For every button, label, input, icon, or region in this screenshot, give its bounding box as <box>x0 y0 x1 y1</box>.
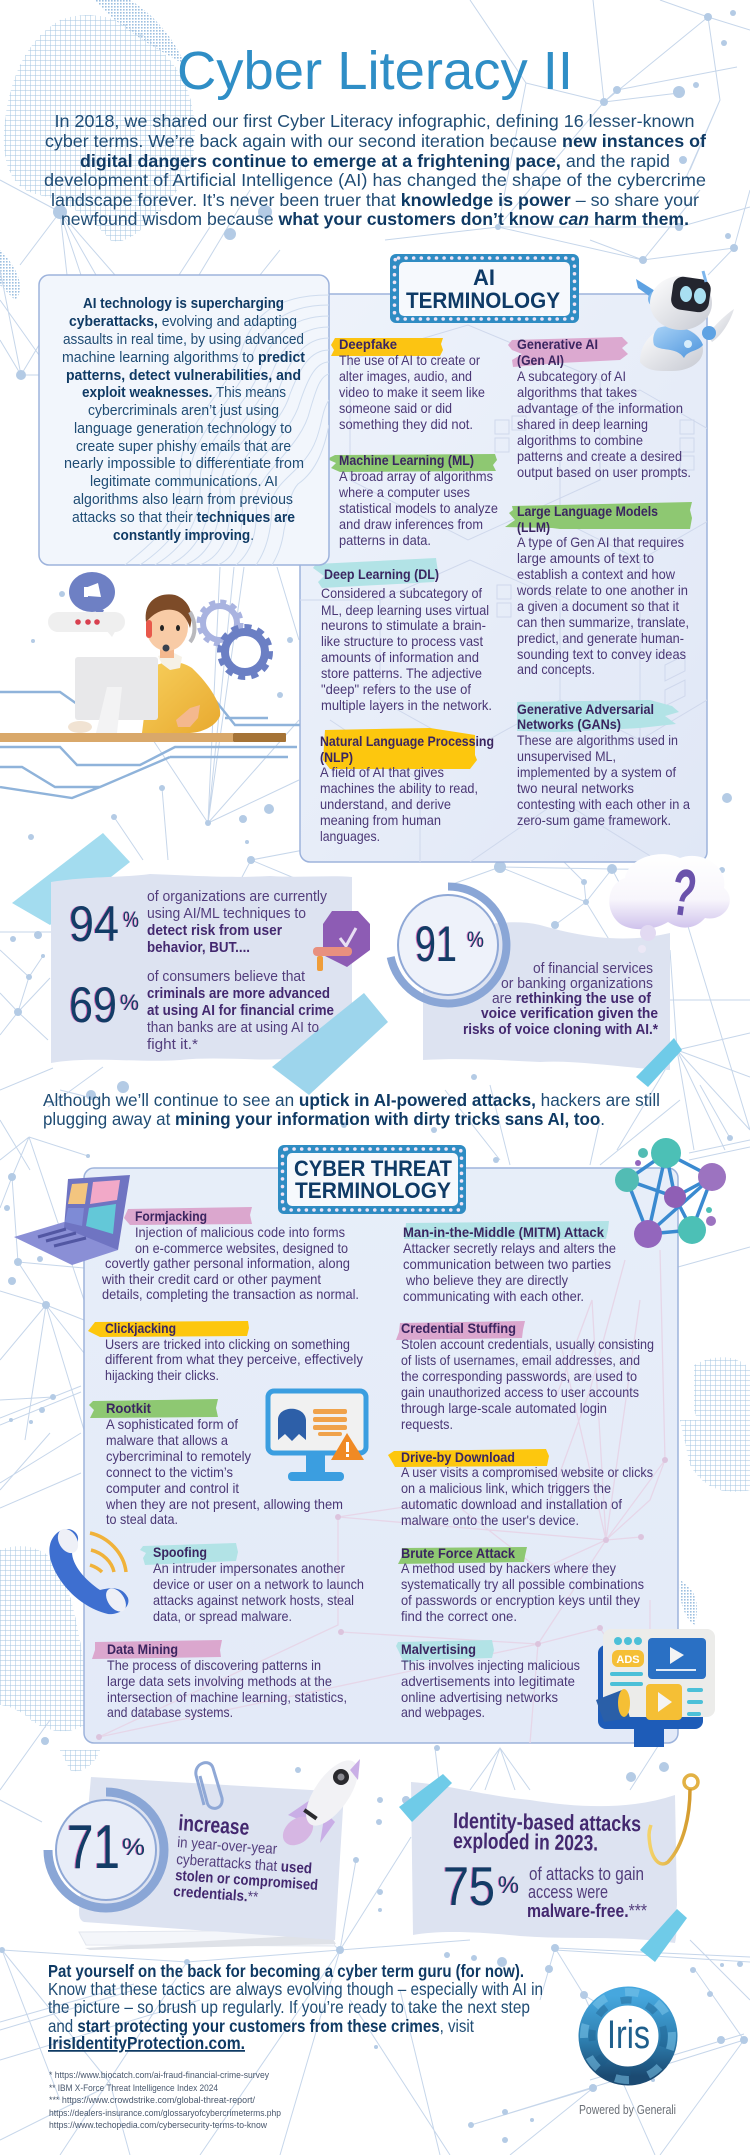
term: Malvertising: Malvertising <box>401 1641 476 1657</box>
tape: top left <box>12 833 130 925</box>
closing paragraph <box>48 1961 543 2053</box>
footnotes <box>49 2070 281 2131</box>
term: Machine Learning: Machine Learning (ML) <box>339 452 474 468</box>
term: Machine Learning: and draw inferences from <box>339 516 483 532</box>
logo: Iris <box>579 1992 676 2117</box>
panel: AI intro box: legitimate communications. AI <box>90 473 278 490</box>
panel: AI intro box: cyberattacks, evolving and adapting <box>69 313 297 330</box>
term: Generative Adversarial Networks: zero-sum game framework. <box>517 812 671 828</box>
term: Large Language Models: (LLM) <box>517 519 550 535</box>
chart: 91% ring <box>391 886 506 1004</box>
term: Natural Language Processing: machines the ability to read, <box>320 780 478 796</box>
text: 69% description: criminals are more advanced <box>147 985 330 1002</box>
chart: 71% ring: 71 <box>67 1813 120 1882</box>
term: Generative AI: algorithms that takes <box>517 384 637 400</box>
term: Deep Learning: amounts of information and <box>321 649 479 665</box>
term: Generative Adversarial Networks: These are algorithms used in <box>517 732 678 748</box>
intro paragraph <box>44 111 706 229</box>
text: 71% description <box>173 1810 319 1906</box>
term: Spoofing: An intruder impersonates another <box>153 1560 345 1576</box>
term: Clickjacking: Users are tricked into clicking on something <box>105 1336 350 1352</box>
stat: 94%: % <box>123 907 139 932</box>
panel: AI intro box: algorithms also learn from previous <box>73 491 293 508</box>
text: 94% description: detect risk from user <box>147 922 282 939</box>
term: Generative AI: output based on user prompts. <box>517 464 691 480</box>
transition text: Although we’ll continue to see an uptick in AI-powered attacks, hackers are still <box>43 1090 660 1110</box>
footnotes: *** https://www.crowdstrike.com/global-threat-report/ <box>49 2095 255 2106</box>
term: Data Mining: and database systems. <box>107 1704 233 1720</box>
text: 94% description: behavior, BUT.... <box>147 939 250 956</box>
term: Man-in-the-Middle: communicating with each other. <box>403 1288 584 1304</box>
term: Drive-by Download: on a malicious link, which triggers the <box>401 1480 611 1496</box>
term: Generative AI: algorithms to combine <box>517 432 643 448</box>
intro paragraph: cyber terms. We’re back again with our second iteration because new instances of <box>45 131 706 151</box>
term: Deep Learning: neurons to stimulate a brain- <box>321 617 486 633</box>
term: Natural Language Processing: (NLP) <box>320 749 353 765</box>
text: 75% description <box>527 1864 647 1921</box>
text: 91% description: or banking organizations <box>501 975 653 992</box>
term: Natural Language Processing: meaning from human <box>320 812 441 828</box>
text: 69% description <box>147 968 334 1053</box>
term: Man-in-the-Middle <box>403 1221 616 1304</box>
stat: 69%: 69 <box>69 977 117 1033</box>
panel: AI intro box: nearly impossible to differentiate from <box>64 455 304 472</box>
chart: 91% ring: % <box>467 927 484 952</box>
stat: 94%: 94 <box>69 896 119 952</box>
transition text: plugging away at mining your information with dirty tricks sans AI, too. <box>43 1109 605 1129</box>
sign: AI terminology: TERMINOLOGY <box>406 288 560 313</box>
tape: top left <box>399 1774 452 1822</box>
transition text <box>43 1090 660 1129</box>
term: Rootkit: cybercriminal to remotely <box>106 1448 251 1464</box>
term: Generative AI: A subcategory of AI <box>517 368 626 384</box>
panel: AI intro box <box>39 275 329 565</box>
term: Clickjacking <box>88 1320 363 1383</box>
icon: shield with lock <box>313 911 370 971</box>
tape: card right <box>272 993 388 1095</box>
text: 75% description: access were <box>528 1882 608 1902</box>
chart: 91% ring: 91 <box>415 916 457 972</box>
text: 69% description: than banks are at using AI to <box>147 1019 319 1036</box>
heading: identity-based attacks: Identity-based attacks <box>453 1808 641 1836</box>
term: Large Language Models: Large Language Models <box>517 503 658 519</box>
panel: cyber threat terminology <box>84 1168 678 1743</box>
heading: identity-based attacks: exploded in 2023. <box>453 1828 598 1856</box>
chart: 71% ring <box>48 1792 164 1908</box>
term: Large Language Models <box>505 502 692 677</box>
term: Rootkit: malware that allows a <box>106 1432 228 1448</box>
term: Rootkit: connect to the victim’s <box>106 1464 233 1480</box>
term: Credential Stuffing: Credential Stuffing <box>401 1320 516 1336</box>
term: Deepfake: alter images, audio, and <box>339 368 472 384</box>
stat: 75%: 75 <box>443 1855 495 1917</box>
term: Generative AI: patterns and create a desired <box>517 448 682 464</box>
stat card: identity-based attacks <box>399 1774 698 1962</box>
term: Generative AI: advantage of the information <box>517 400 683 416</box>
text: 91% description: voice verification given the <box>481 1005 658 1022</box>
panel: AI intro box: cybercriminals aren’t just using <box>88 402 279 419</box>
term: Credential Stuffing: of lists of usernames, email addresses, and <box>401 1352 640 1368</box>
panel: AI intro box: machine learning algorithms to predict <box>62 349 305 366</box>
term: Credential Stuffing: gain unauthorized access to user accounts <box>401 1384 639 1400</box>
term: Machine Learning: where a computer uses <box>338 484 470 500</box>
term: Generative AI <box>508 336 691 480</box>
sign: cyber threat terminology: TERMINOLOGY <box>295 1178 451 1203</box>
text: 94% description: of organizations are currently <box>147 888 327 905</box>
sign: cyber threat terminology: CYBER THREAT <box>294 1156 453 1181</box>
text: 94% description: using AI/ML techniques to <box>147 905 306 922</box>
icon: paperclip <box>196 1763 222 1808</box>
term: Generative AI: (Gen AI) <box>517 352 564 368</box>
text: 69% description: at using AI for financial crime <box>147 1002 334 1019</box>
sign: AI terminology <box>390 254 579 323</box>
term: Deep Learning: Considered a subcategory of <box>321 585 482 601</box>
term: Data Mining: Data Mining <box>107 1641 178 1657</box>
closing paragraph: and start protecting your customers from these crimes, visit <box>48 2016 474 2036</box>
term: Large Language Models: and concepts. <box>517 661 595 677</box>
term: Formjacking: covertly gather personal information, along <box>105 1255 350 1271</box>
term: Malvertising: and webpages. <box>401 1704 485 1720</box>
term: Machine Learning: A broad array of algorithms <box>339 468 493 484</box>
term: Data Mining: The process of discovering patterns in <box>107 1657 321 1673</box>
text: 75% description: of attacks to gain <box>529 1864 644 1884</box>
term: Deep Learning: Deep Learning (DL) <box>324 566 439 582</box>
intro paragraph: newfound wisdom because what your customers don’t know can harm them. <box>61 209 689 229</box>
closing paragraph: Pat yourself on the back for becoming a cyber term guru (for now). <box>48 1961 524 1981</box>
term: Brute Force Attack: Brute Force Attack <box>401 1545 515 1561</box>
term: Man-in-the-Middle: Man-in-the-Middle (MITM) Attack <box>403 1224 604 1240</box>
panel: AI intro box: attacks so that their techniques are <box>72 509 295 526</box>
term: Generative Adversarial Networks: unsupervised ML, <box>517 748 616 764</box>
term: Generative Adversarial Networks: Generative Adversarial <box>517 701 654 717</box>
term: Deep Learning <box>313 558 492 713</box>
term: Clickjacking: different from what they perceive, effectively <box>105 1351 363 1367</box>
term: Large Language Models: A type of Gen AI that requires <box>517 534 684 550</box>
term: Large Language Models: sounding text to convey ideas <box>517 646 686 662</box>
stat: 75%: % <box>498 1872 519 1899</box>
sign: cyber threat terminology <box>278 1145 466 1214</box>
term: Malvertising <box>396 1640 580 1720</box>
text: 71% description: increase <box>178 1810 250 1840</box>
term: Large Language Models: can then summarize, translate, <box>517 614 689 630</box>
footnotes: * https://www.biocatch.com/ai-fraud-financial-crime-survey <box>49 2070 269 2081</box>
tape: bottom right <box>640 1909 687 1962</box>
term: Malvertising: advertisements into legitimate <box>401 1673 575 1689</box>
panel: AI intro box: exploit weaknesses. This means <box>82 384 286 401</box>
term: Rootkit: A sophisticated form of <box>106 1416 238 1432</box>
term: Deepfake: someone said or did <box>339 400 452 416</box>
term: Deep Learning: multiple layers in the network. <box>321 697 492 713</box>
closing paragraph: the picture – so brush up regularly. If you’re ready to take the next step <box>48 1997 530 2017</box>
term: Spoofing: device or user on a network to launch <box>153 1576 364 1592</box>
term: Natural Language Processing: Natural Language Processing <box>320 733 494 749</box>
footnotes: https://www.techopedia.com/cybersecurity-terms-to-know <box>49 2120 267 2131</box>
text: 71% description: stolen or compromised <box>175 1867 319 1894</box>
closing paragraph: IrisIdentityProtection.com. <box>48 2033 245 2053</box>
term: Credential Stuffing <box>396 1320 654 1432</box>
term: Large Language Models: large amounts of text to <box>517 550 654 566</box>
term: Rootkit: Rootkit <box>106 1400 151 1416</box>
term: Formjacking: on e-commerce websites, designed to <box>135 1240 348 1256</box>
tape: 91% card <box>636 1038 682 1087</box>
term: Deep Learning: like structure to process vast <box>321 633 483 649</box>
term: Natural Language Processing <box>320 728 494 844</box>
term: Generative AI: Generative AI <box>517 336 598 352</box>
term: Deep Learning: "deep" refers to the use of <box>321 681 471 697</box>
text: 91% description <box>463 960 658 1038</box>
term: Credential Stuffing: requests. <box>401 1416 453 1432</box>
term: Brute Force Attack: A method used by hackers where they <box>401 1560 616 1576</box>
logo: Iris: Powered by Generali <box>579 2102 676 2117</box>
text: 71% description: in year-over-year <box>177 1834 278 1858</box>
stat card: 94% and 69% <box>51 874 388 1095</box>
term: Brute Force Attack: of passwords or encryption keys until they <box>401 1592 640 1608</box>
panel: AI intro box: patterns, detect vulnerabilities, and <box>66 367 301 384</box>
icon: monitor with warning <box>268 1391 366 1481</box>
text: 75% description: malware-free.*** <box>527 1901 647 1921</box>
term: Rootkit: when they are not present, allowing them <box>105 1496 343 1512</box>
term: Formjacking: with their credit card or other payment <box>101 1271 321 1287</box>
term: Generative Adversarial Networks: two neural networks <box>517 780 634 796</box>
term: Brute Force Attack: systematically try all possible combinations <box>401 1576 644 1592</box>
term: Deepfake: video to make it seem like <box>339 384 485 400</box>
icon: phone with signal <box>49 1525 130 1615</box>
text: 69% description: fight it.* <box>147 1036 198 1053</box>
text: 91% description: risks of voice cloning with AI.* <box>463 1021 658 1038</box>
stat card: 71% increase <box>48 1752 368 1950</box>
footnotes: ** IBM X-Force Threat Intelligence Index 2024 <box>49 2083 218 2094</box>
text: 69% description: of consumers believe that <box>147 968 306 985</box>
circuit lines <box>0 692 300 798</box>
term: Rootkit: to steal data. <box>106 1511 178 1527</box>
term: Rootkit <box>89 1399 343 1527</box>
icon: typing bubble <box>48 612 125 637</box>
term: Brute Force Attack: find the correct one. <box>401 1608 517 1624</box>
term: Generative AI: shared in deep learning <box>517 416 648 432</box>
term: Malvertising: This involves injecting malicious <box>401 1657 580 1673</box>
term: Spoofing: data, or spread malware. <box>153 1608 292 1624</box>
term: Drive-by Download <box>388 1449 653 1528</box>
text: 94% description <box>147 888 327 956</box>
term: Generative Adversarial Networks <box>517 700 690 828</box>
term: Natural Language Processing: understand, and derive <box>320 796 451 812</box>
term: Data Mining: large data sets involving methods at the <box>107 1673 332 1689</box>
term: Formjacking: Formjacking <box>135 1208 207 1224</box>
term: Natural Language Processing: A field of AI that gives <box>320 764 444 780</box>
stat card: 91% <box>391 886 670 1070</box>
panel: AI intro box: AI technology is supercharging <box>83 295 284 312</box>
text: 91% description: are rethinking the use of <box>492 990 652 1007</box>
text: 71% description: credentials.** <box>173 1883 259 1906</box>
intro paragraph: digital dangers continue to emerge at a frightening pace, and the rapid <box>80 151 670 171</box>
icon: molecule network <box>615 1138 726 1248</box>
term: Large Language Models: predict, and generate human- <box>517 630 684 646</box>
term: Deepfake <box>331 336 485 432</box>
term: Drive-by Download: A user visits a compromised website or clicks <box>401 1464 653 1480</box>
intro paragraph: development of Artificial Intelligence (AI) has changed the shape of the cybercrime <box>44 170 706 190</box>
icon: ads monitor <box>596 1629 715 1747</box>
term: Large Language Models: words relate to one another in <box>516 582 688 598</box>
intro paragraph: In 2018, we shared our first Cyber Literacy infographic, defining 16 lesser-known <box>54 111 694 131</box>
text: 91% description: of financial services <box>533 960 653 977</box>
icon: rocket <box>277 1752 368 1851</box>
panel: AI intro box: assaults in real time, by using advanced <box>63 331 304 348</box>
term: Large Language Models: establish a context and how <box>517 566 676 582</box>
chart: 71% ring: % <box>122 1834 145 1861</box>
term: Machine Learning <box>327 452 498 548</box>
term: Generative Adversarial Networks: contesting with each other in a <box>517 796 690 812</box>
icon: thought cloud with question mark <box>609 854 730 953</box>
term: Formjacking <box>101 1207 359 1302</box>
term: Credential Stuffing: Stolen account credentials, usually consisting <box>401 1336 654 1352</box>
icon: laptop <box>14 1175 130 1265</box>
term: Natural Language Processing: languages. <box>320 828 380 844</box>
term: Formjacking: Injection of malicious code into forms <box>135 1224 345 1240</box>
illustration: support agent at desk <box>0 572 286 742</box>
term: Spoofing: attacks against network hosts, steal <box>153 1592 354 1608</box>
term: Drive-by Download: malware onto the user's device. <box>401 1512 579 1528</box>
panel: AI intro box: constantly improving. <box>113 527 254 544</box>
stat: 69%: % <box>120 990 139 1015</box>
term: Clickjacking: hijacking their clicks. <box>105 1367 219 1383</box>
panel: AI intro box: language generation technology to <box>74 420 292 437</box>
logo: Iris: Iris <box>607 2013 650 2057</box>
intro paragraph: landscape forever. It’s never been truer that knowledge is power – so share your <box>51 190 699 210</box>
icon: megaphone bubble <box>59 572 115 619</box>
term: Deep Learning: ML, deep learning uses virtual <box>321 602 489 618</box>
icon: robot <box>636 271 734 371</box>
closing paragraph: Know that these tactics are always evolving though – especially with AI in <box>48 1979 543 1999</box>
term: Clickjacking: Clickjacking <box>105 1320 176 1336</box>
text: 71% description: cyberattacks that used <box>176 1851 313 1877</box>
term: Rootkit: computer and control it <box>106 1480 239 1496</box>
term: Formjacking: details, completing the transaction as normal. <box>102 1286 359 1302</box>
term: Man-in-the-Middle: who believe they are directly <box>405 1272 568 1288</box>
panel: AI intro box: create super phishy emails that are <box>76 438 291 455</box>
term: Generative Adversarial Networks: Networks (GANs) <box>517 716 621 732</box>
term: Man-in-the-Middle: Attacker secretly relays and alters the <box>403 1240 616 1256</box>
term: Brute Force Attack <box>398 1545 644 1624</box>
icon: ads monitor: ADS <box>616 1654 640 1666</box>
term: Deepfake: Deepfake <box>339 336 397 352</box>
term: Man-in-the-Middle: communication between two parties <box>403 1256 611 1272</box>
term: Generative Adversarial Networks: implemented by a system of <box>517 764 676 780</box>
term: Machine Learning: statistical models to analyze <box>339 500 498 516</box>
term: Drive-by Download: Drive-by Download <box>401 1449 515 1465</box>
term: Data Mining: intersection of machine learning, statistics, <box>107 1689 347 1705</box>
sign: AI terminology: AI <box>473 265 495 290</box>
heading: identity-based attacks <box>453 1808 641 1856</box>
icon: fishing hook <box>649 1775 698 1864</box>
term: Credential Stuffing: the corresponding passwords, are used to <box>401 1368 637 1384</box>
term: Large Language Models: a given a document so that it <box>517 598 679 614</box>
term: Credential Stuffing: through large-scale automated login <box>401 1400 607 1416</box>
term: Spoofing: Spoofing <box>153 1544 207 1560</box>
term: Deep Learning: store patterns. The adjective <box>321 665 482 681</box>
icon: thought cloud with question mark: ? <box>667 854 701 931</box>
term: Machine Learning: patterns in data. <box>339 532 431 548</box>
term: Data Mining <box>92 1640 347 1720</box>
term: Deepfake: something they did not. <box>339 416 473 432</box>
panel: AI terminology <box>300 294 710 862</box>
title: Cyber Literacy II <box>177 41 573 101</box>
term: Drive-by Download: automatic download and installation of <box>401 1496 622 1512</box>
term: Malvertising: online advertising networks <box>401 1689 558 1705</box>
term: Spoofing <box>140 1543 364 1624</box>
footnotes: https://dealers-insurance.com/glossaryofcybercrimeterms.php <box>49 2108 281 2119</box>
icon: gears <box>199 602 270 677</box>
term: Deepfake: The use of AI to create or <box>339 352 480 368</box>
